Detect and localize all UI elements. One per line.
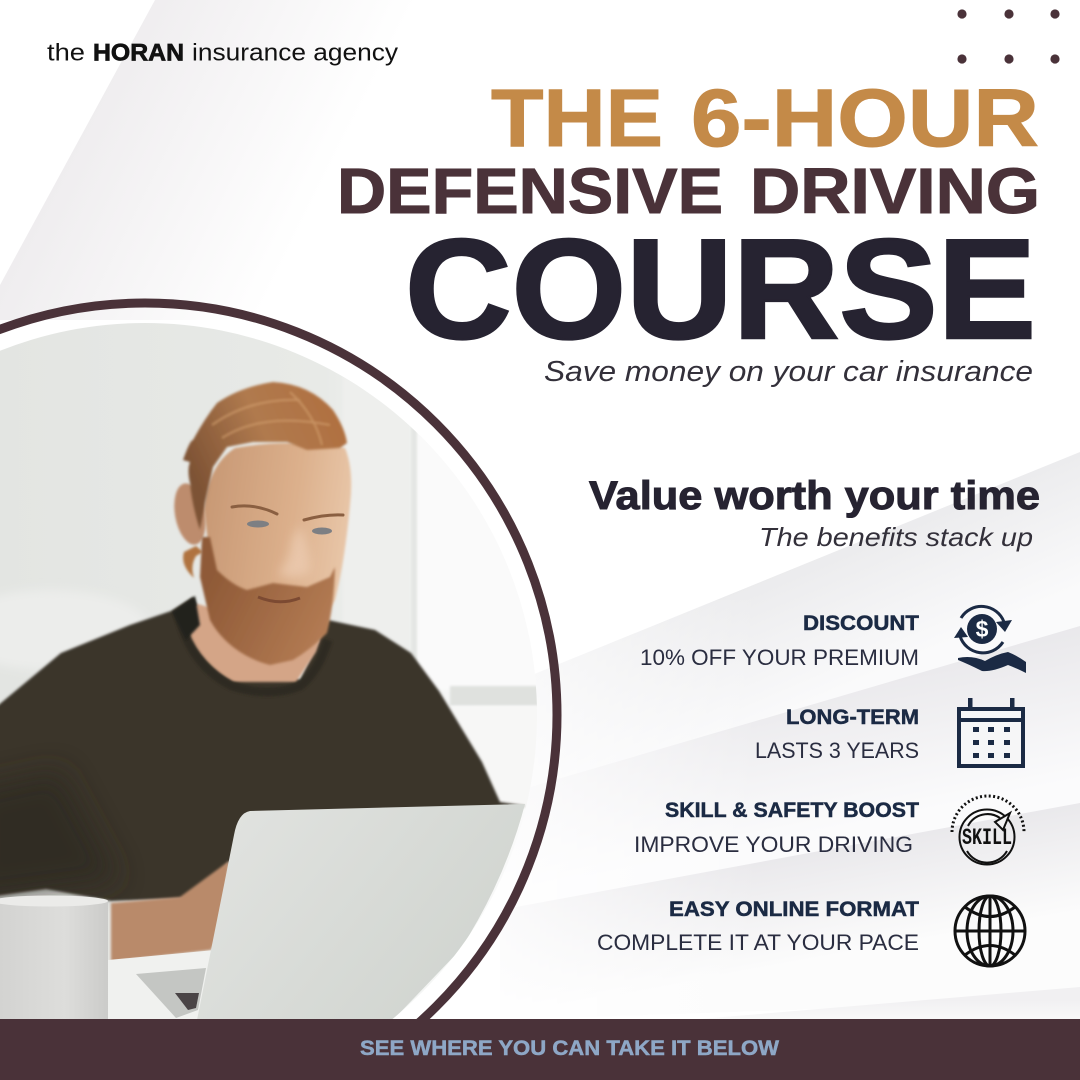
icon: calendar [959,698,1023,766]
section subheading: The benefits stack up [759,522,1033,552]
section heading: Value worth your time [589,474,1040,518]
title line: the 6-hour: 6-HOUR [691,73,1039,164]
sweater [0,597,525,901]
skill heading: SKILL & SAFETY BOOST [665,799,919,822]
discount detail: 10% OFF YOUR PREMIUM [640,645,919,670]
online heading: EASY ONLINE FORMAT [669,898,919,921]
logo text [47,40,398,66]
icon: globe [955,896,1025,966]
ear and ponytail [172,482,206,578]
logo text: HORAN [93,40,184,66]
mouth [258,597,300,602]
eyebrows [232,506,343,520]
subtitle: Save money on your car insurance [544,356,1033,388]
laptop lid [197,804,525,1020]
photo circle [0,300,550,1030]
hair [183,382,347,530]
sweater collar [178,629,331,696]
photo: man working on a laptop [0,300,557,1080]
title line: defensive driving: DRIVING [750,155,1040,227]
long-term detail: LASTS 3 YEARS [755,738,919,763]
photo background wall [0,323,450,1009]
icon: dollar coin over hand: $ [976,616,989,642]
benefit: discount [640,612,919,670]
laptop base [136,968,206,1018]
background shards: right side [500,452,1080,1020]
title [337,73,1040,369]
hand [111,861,229,962]
eyes [247,520,332,534]
title line: the 6-hour: THE [491,73,663,164]
online detail: COMPLETE IT AT YOUR PACE [597,930,919,955]
table [108,950,215,1020]
benefit: easy online format [597,898,919,955]
benefit: long-term [755,706,919,763]
beard [200,537,335,665]
skill detail: IMPROVE YOUR DRIVING [634,832,913,857]
hair streaks [212,392,330,445]
nose highlight [278,525,310,578]
face [204,442,352,606]
benefit: skill and safety [634,799,919,857]
long-term heading: LONG-TERM [786,706,919,729]
icon: skill gauge: SKILL [962,825,1012,851]
title line: course: COURSE [405,210,1036,369]
neck [178,604,320,682]
background shard: top left [0,0,520,320]
discount heading: DISCOUNT [803,612,919,635]
logo text: the [47,40,85,66]
coffee mug [0,896,108,1020]
footer bar [0,1019,1080,1080]
title line: defensive driving [337,155,1040,227]
title line: defensive driving: DEFENSIVE [337,155,723,227]
icon: dollar coin over hand [954,606,1026,673]
photo ring [0,303,557,1080]
title line: the 6-hour [491,73,1039,164]
icon: skill gauge [952,796,1024,864]
decorative dots [957,9,1060,64]
logo text: insurance agency [192,40,398,66]
footer text: SEE WHERE YOU CAN TAKE IT BELOW [360,1037,779,1060]
